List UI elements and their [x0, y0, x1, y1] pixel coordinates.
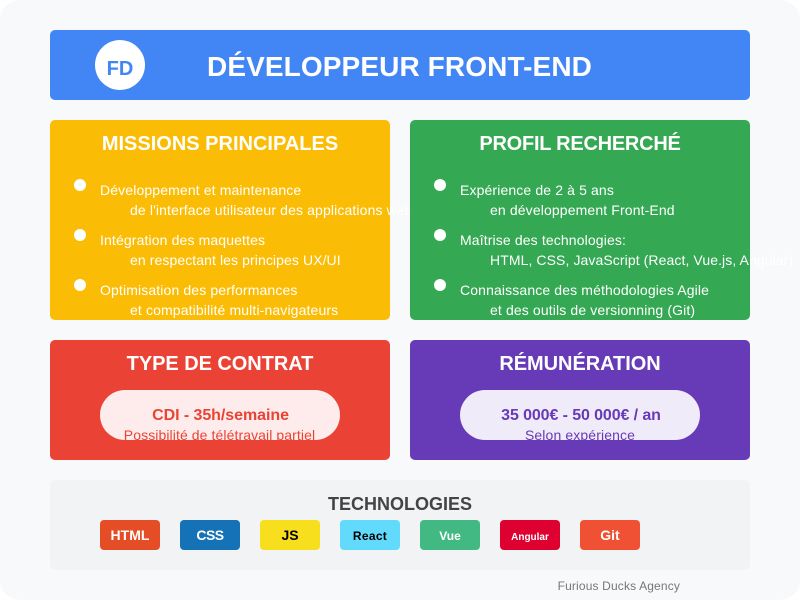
pill: salaire	[460, 390, 700, 440]
text: mission 3: et compatibilité multi-navigateurs	[130, 302, 338, 318]
text: selon expérience: Selon expérience	[525, 427, 635, 443]
badge: React: React	[353, 529, 387, 543]
text: profil 3: Connaissance des méthodologies Agile	[460, 282, 709, 298]
text: mission 2: en respectant les principes UX/UI	[130, 252, 341, 268]
text: mission 1: Développement et maintenance	[100, 182, 301, 198]
badge: Angular	[500, 520, 560, 550]
panel: type de contrat	[50, 340, 390, 460]
heading: rémunération: RÉMUNÉRATION	[499, 352, 661, 375]
logo badge	[95, 40, 145, 90]
panel: missions principales	[50, 120, 413, 320]
panel: rémunération	[410, 340, 750, 460]
badge: Git: Git	[600, 527, 620, 543]
text: salaire: 35 000€ - 50 000€ / an	[501, 407, 661, 424]
text: mission 1: de l'interface utilisateur des applications web	[130, 202, 413, 218]
text: mission 3: Optimisation des performances	[100, 282, 298, 298]
bullet 1	[434, 179, 446, 191]
header banner	[50, 30, 750, 100]
badge: CSS: CSS	[196, 527, 224, 543]
heading: contrat: TYPE DE CONTRAT	[127, 353, 313, 375]
badge: HTML	[100, 520, 160, 550]
text: mission 2: Intégration des maquettes	[100, 232, 265, 248]
panel: profil recherché	[410, 120, 793, 320]
badge: CSS	[180, 520, 240, 550]
text: profil 1: Expérience de 2 à 5 ans	[460, 182, 614, 198]
badge: Git	[580, 520, 640, 550]
text: profil 2: HTML, CSS, JavaScript (React, Vue.js, Angular)	[490, 252, 793, 268]
badge: HTML: HTML	[111, 527, 150, 543]
badge: Vue	[420, 520, 480, 550]
badge: Vue: Vue	[439, 529, 461, 543]
badge: JS	[260, 520, 320, 550]
bullet 1	[74, 179, 86, 191]
text: profil 1: en développement Front-End	[490, 202, 675, 218]
bullet 3	[74, 279, 86, 291]
text: profil 3: et des outils de versionning (Git)	[490, 302, 695, 318]
heading: technologies: TECHNOLOGIES	[328, 494, 472, 514]
badge: Angular: Angular	[511, 532, 549, 543]
bullet 2	[74, 229, 86, 241]
bullet 2	[434, 229, 446, 241]
heading: missions: MISSIONS PRINCIPALES	[102, 133, 338, 155]
text: CDI: CDI - 35h/semaine	[152, 407, 289, 424]
text: profil 2: Maîtrise des technologies:	[460, 232, 626, 248]
badge: JS: JS	[281, 527, 299, 543]
logo badge: FD	[107, 58, 133, 80]
badge: React	[340, 520, 400, 550]
pill: contrat	[100, 390, 340, 440]
text: télétravail: Possibilité de télétravail partiel	[124, 427, 315, 443]
bullet 3	[434, 279, 446, 291]
panel: technologies	[50, 480, 750, 570]
footer credit: Furious Ducks Agency	[558, 579, 680, 593]
heading: profil: PROFIL RECHERCHÉ	[479, 132, 681, 155]
title: DÉVELOPPEUR FRONT-END	[207, 51, 592, 82]
